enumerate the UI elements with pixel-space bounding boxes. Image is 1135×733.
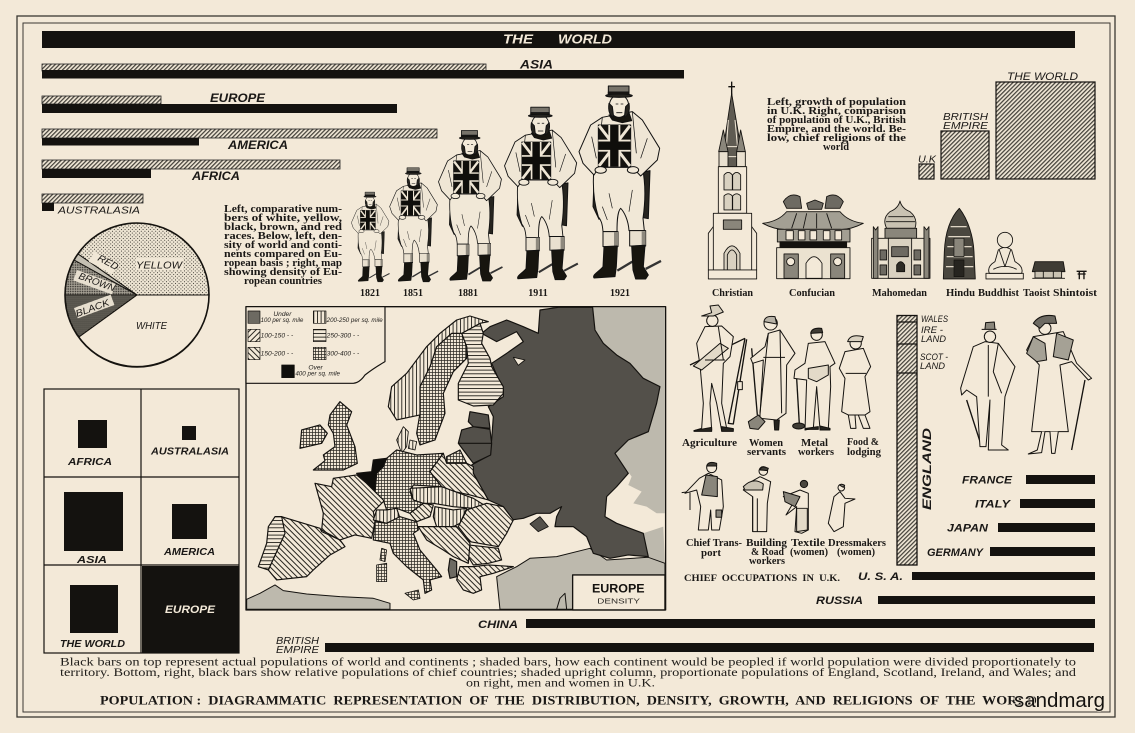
sweden (417, 333, 467, 445)
map title box: EUROPE (592, 582, 645, 596)
square: u.k.: U.K (918, 154, 937, 166)
asia minor (497, 548, 665, 609)
caption text: territory. Bottom, right, black bars show relative populations of chief countries; shaded upright column, proportionate populations of England, Scotland, Ireland, and Wales; and (60, 665, 1076, 679)
column labels (920, 314, 949, 510)
bar: africa: AFRICA (191, 171, 240, 183)
religion labels: Buddhist (978, 288, 1020, 299)
bar: russia (816, 595, 1095, 607)
switzerland (373, 508, 400, 523)
bar: japan: JAPAN (947, 522, 989, 534)
australasia square: AUSTRALASIA (150, 446, 229, 458)
bar: china: CHINA (478, 619, 518, 631)
bar: italy (975, 498, 1095, 510)
religion labels: Hindu (946, 288, 975, 299)
bar: asia (42, 60, 684, 78)
column labels: LAND (921, 334, 946, 345)
finland (458, 323, 503, 406)
column labels: ENGLAND (922, 428, 934, 510)
legend box: 100 per sq. mile (261, 317, 304, 324)
year labels (360, 288, 630, 299)
baltic states (458, 412, 492, 463)
year labels: 1851 (403, 288, 423, 299)
europe square: EUROPE (165, 604, 216, 616)
occupation labels: port (701, 548, 722, 559)
america square: AMERICA (163, 546, 215, 558)
text block: left description: ropean basis ; right, map (224, 258, 342, 269)
text block: left description: black, brown, and red (224, 222, 343, 233)
legend box: 400 per sq. mile (295, 370, 340, 377)
low countries (357, 458, 387, 492)
watermark: sandmarg (1014, 690, 1105, 712)
figure: lady (1027, 315, 1092, 454)
africa square (67, 420, 112, 468)
occupation labels: servants (747, 447, 786, 458)
caption text: on right, men and women in U.K. (466, 676, 655, 690)
bar: the world (42, 31, 1075, 48)
yellow slice (78, 223, 209, 295)
column: u.k. populations (897, 316, 917, 565)
occupation labels: Chief Trans- (686, 538, 742, 549)
bar: france: FRANCE (962, 474, 1013, 486)
occupation labels: & Road (751, 547, 784, 558)
asia square (64, 492, 123, 566)
bar: the world: WORLD (558, 32, 612, 46)
figure: chief transport (682, 462, 723, 530)
figure: agriculture (690, 305, 747, 431)
occupation labels: lodging (847, 447, 881, 458)
icon: shinto gate (1077, 271, 1087, 279)
figure: food and lodging (839, 336, 871, 428)
bar: america: AMERICA (227, 140, 288, 152)
religion labels (712, 288, 1098, 299)
pie chart: races (65, 223, 209, 367)
red slice (74, 254, 137, 295)
greece (457, 565, 513, 593)
africa square: AFRICA (67, 456, 112, 468)
legend box: Over (308, 364, 324, 371)
bar: america (42, 129, 437, 152)
europe square (142, 566, 239, 653)
year labels: 1821 (360, 288, 380, 299)
bar: australasia (42, 194, 143, 216)
religion labels: Shintoist (1053, 288, 1098, 299)
year labels: 1911 (528, 288, 548, 299)
legend box: 100-150 - - (261, 332, 294, 339)
caption text: Black bars on top represent actual populations of world and continents ; shaded bars, how each continent would be peopled if world population were divided proportionately to (60, 654, 1076, 668)
ireland (300, 425, 327, 448)
column labels: WALES (921, 314, 949, 325)
bar: british empire: EMPIRE (276, 645, 319, 656)
bar: africa (42, 160, 340, 183)
square: u.k. (918, 154, 937, 179)
figure: textile worker (783, 480, 808, 533)
squares panel: density (44, 389, 239, 653)
bar: australasia: AUSTRALASIA (57, 204, 140, 216)
yugoslavia (418, 527, 470, 563)
black slice (65, 295, 137, 337)
text block: growth description: low, chief religions of the (767, 133, 907, 144)
occupation labels: (women) (837, 547, 875, 558)
figure: man 1821 (351, 192, 390, 282)
year labels: 1921 (610, 288, 630, 299)
religion labels: Christian (712, 288, 753, 299)
year labels: 1881 (458, 288, 478, 299)
figure: metal workers (793, 328, 835, 430)
russia (472, 307, 660, 558)
figure: dressmaker (828, 484, 855, 532)
america square (163, 504, 215, 558)
italy (373, 517, 442, 593)
occupation labels: Food & (847, 437, 879, 448)
asia square: ASIA (76, 554, 107, 566)
text block: left description: bers of white, yellow, (224, 213, 343, 224)
text block: growth description: of population of U.K., British (767, 115, 906, 126)
czechoslovakia (410, 487, 487, 508)
text block: left description: nents compared on Eu- (224, 249, 342, 260)
text block: left description: ropean countries (244, 276, 322, 287)
religion labels: Taoist (1023, 288, 1051, 299)
romania (458, 503, 513, 547)
bar: u.s.a.: U. S. A. (858, 571, 903, 583)
pie outline (65, 223, 209, 367)
text block: left description: sity of world and conti- (224, 240, 342, 251)
east prussia (447, 450, 467, 463)
figure: man 1911 (505, 107, 578, 280)
figure: man 1881 (438, 130, 502, 281)
brown slice (65, 260, 137, 295)
germany (375, 450, 443, 513)
australasia square (150, 426, 229, 458)
occupation labels: workers (749, 556, 785, 567)
pie labels (73, 252, 184, 332)
occupation labels: Metal (801, 438, 828, 449)
occupation labels: (women) (790, 547, 828, 558)
occupations: figures (682, 305, 1092, 533)
bar: italy: ITALY (975, 498, 1012, 510)
text block: left description: Left, comparative num- (224, 204, 342, 215)
united kingdom (313, 402, 357, 470)
pie labels: RED (96, 253, 120, 273)
france (315, 475, 385, 540)
occupation labels: CHIEF OCCUPATIONS IN U.K. (684, 574, 840, 584)
bar: germany: GERMANY (927, 547, 985, 559)
occupation labels: Textile (791, 538, 826, 549)
austria (410, 503, 433, 522)
legend box: Under (273, 311, 292, 318)
square: british empire: EMPIRE (943, 120, 989, 132)
pie labels: WHITE (136, 321, 167, 332)
icon: christian church (708, 82, 757, 279)
pie labels: YELLOW (136, 260, 184, 272)
main title: POPULATION : DIAGRAMMATIC REPRESENTATION OF THE DISTRIBUTION, DENSITY, GROWTH, AND RELIGIONS OF THE WORLD (100, 694, 1037, 708)
bar: japan (947, 522, 1095, 534)
square: british empire: BRITISH (943, 111, 988, 123)
map title box: DENSITY (597, 596, 640, 605)
text block: growth description: world (823, 142, 849, 153)
text block: growth description: Empire, and the world. Be- (767, 124, 906, 135)
bar: europe: EUROPE (210, 93, 265, 105)
country bars: population (276, 474, 1095, 656)
norway (388, 316, 488, 420)
bar: asia: ASIA (519, 60, 553, 72)
world square (60, 585, 125, 650)
text block: left description: races. Below, left, den- (224, 231, 342, 242)
text block: growth description: Left, growth of population (767, 97, 907, 108)
bar: the world: THE (503, 32, 534, 46)
occupation labels: Building (746, 538, 787, 549)
icon: hindu temple (943, 208, 975, 279)
text block: growth description: in U.K. Right, comparison (767, 106, 907, 117)
poland (430, 453, 488, 500)
north africa (247, 585, 567, 609)
figure: gentleman (961, 322, 1015, 450)
map: europe density (246, 307, 666, 610)
bar: germany (927, 547, 1095, 559)
icon: mahomedan mosque (872, 201, 930, 278)
bar: u.s.a. (858, 571, 1095, 583)
religion labels: Mahomedan (872, 288, 927, 299)
legend box: 150-200 - - (261, 350, 294, 357)
bar: europe (42, 93, 397, 113)
occupation labels: Agriculture (682, 438, 738, 449)
caption text (60, 654, 1076, 690)
square: the world: THE WORLD (1007, 71, 1078, 83)
bar: british empire: BRITISH (276, 636, 320, 647)
bar: british empire (276, 636, 1094, 656)
text block: growth description (767, 97, 907, 153)
square: british empire (941, 111, 989, 179)
figure: man 1921 (579, 86, 661, 279)
map title box (573, 575, 665, 610)
occupation labels: Dressmakers (828, 538, 886, 549)
column labels: SCOT - (920, 352, 948, 363)
albania (448, 558, 457, 578)
figure: building and road workers (743, 467, 771, 532)
bar: france (962, 474, 1095, 486)
occupation labels (682, 437, 886, 584)
hungary (433, 507, 467, 527)
legend box: 250-300 - - (326, 332, 360, 339)
bar: russia: RUSSIA (816, 595, 863, 607)
spain (268, 517, 345, 580)
religion labels: Confucian (789, 288, 835, 299)
islands (377, 548, 420, 600)
legend box (246, 307, 385, 383)
text block: left description (224, 204, 343, 287)
occupation labels: workers (798, 447, 834, 458)
legend box: 300-400 - - (327, 350, 360, 357)
column labels: IRE - (921, 325, 943, 336)
world square: THE WORLD (60, 638, 125, 650)
column labels: LAND (920, 361, 945, 372)
figure: man 1851 (390, 168, 438, 282)
square: the world (996, 71, 1095, 179)
text block: left description: showing density of Eu- (224, 267, 342, 278)
crimea (530, 517, 548, 532)
legend box: 200-250 per sq. mile (326, 317, 383, 324)
figure: women servants (748, 316, 795, 430)
asia grey land (593, 307, 665, 513)
icon: taoist temple (1032, 262, 1065, 278)
icon: confucian temple (763, 195, 863, 279)
occupation labels: Women (749, 438, 783, 449)
icon: buddha (986, 232, 1023, 279)
bar: china (478, 619, 1095, 631)
bulgaria (468, 545, 502, 565)
pie labels: BROWN (77, 271, 117, 294)
portugal (258, 517, 285, 570)
white slice (79, 295, 209, 366)
denmark (397, 427, 417, 453)
icons: religious buildings (708, 82, 1087, 279)
pie labels: BLACK (74, 297, 112, 320)
